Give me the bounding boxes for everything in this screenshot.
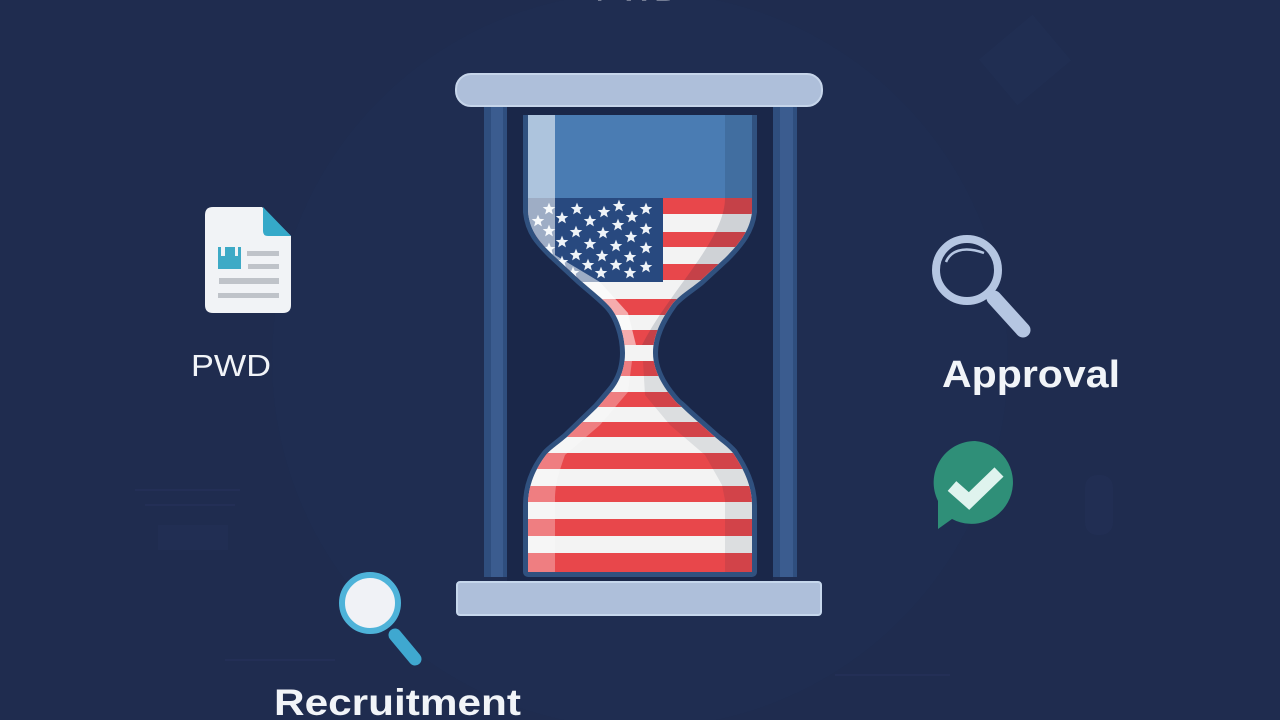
- label: Approval: Approval: [942, 354, 1120, 396]
- bottom base: [457, 582, 821, 615]
- star canton: [520, 198, 663, 282]
- label: PWD: PWD: [191, 348, 271, 383]
- glass left highlight: [520, 110, 636, 345]
- document icon: [205, 207, 291, 313]
- top cap: [456, 74, 822, 106]
- folded corner: [263, 207, 291, 236]
- flag filling the glass: [520, 110, 760, 578]
- icon: recruitment magnifier: [342, 575, 415, 659]
- glass outline: [528, 115, 752, 572]
- sky-blue upper section: [528, 115, 752, 198]
- hourglass: [456, 74, 822, 615]
- icon: green check badge: [934, 441, 1013, 529]
- red stripes: [520, 198, 760, 572]
- icon: approval magnifier: [936, 239, 1023, 330]
- white stripe base: [528, 212, 752, 553]
- dark glass surround: [507, 107, 773, 581]
- dark gap under cap: [507, 107, 773, 115]
- hourglass frame posts: [484, 107, 797, 577]
- text lines: [218, 251, 279, 298]
- glass right shadow: [642, 110, 760, 345]
- teal picture block: [218, 247, 241, 269]
